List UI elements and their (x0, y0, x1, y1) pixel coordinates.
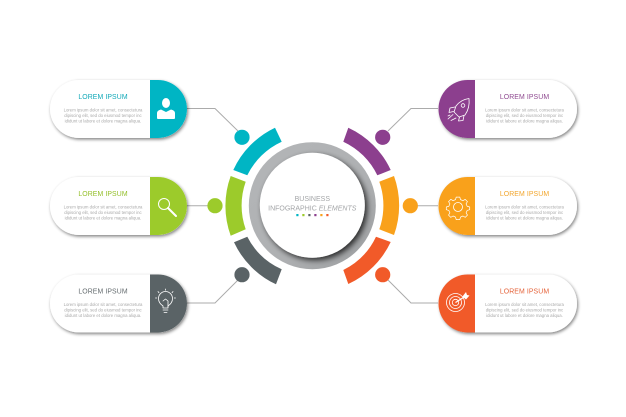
panel: gray card: Lorem ipsum dolor sit amet, consectetura (64, 302, 143, 307)
panel: green card: Lorem ipsum dolor sit amet, consectetura (64, 204, 143, 210)
panel: green card: LOREM IPSUM (78, 191, 128, 198)
panel: green card (50, 177, 187, 235)
central circle (249, 142, 376, 269)
panel: red card: LOREM IPSUM (500, 288, 549, 296)
panel: teal card (50, 80, 187, 138)
center title: INFOGRAPHIC ELEMENTS (268, 206, 357, 213)
panel: red card (438, 274, 577, 332)
panel: green card: ididunt ut labore et dolore magna aliqua. (65, 216, 141, 220)
arc segments (225, 128, 399, 284)
center title (268, 196, 357, 213)
node dots (207, 130, 418, 282)
panel: purple card (438, 80, 577, 138)
panel: teal card: Lorem ipsum dolor sit amet, consectetura (64, 108, 143, 112)
panel: teal card: ididunt ut labore et dolore magna aliqua. (65, 118, 141, 124)
panel: gray card (50, 274, 187, 332)
panel: red card: dipiscing elit, sed do eiusmod tempor inc (486, 308, 564, 312)
panel: purple card: Lorem ipsum dolor sit amet, consectetura (485, 108, 565, 112)
icon: rocket (448, 98, 469, 121)
panel: teal card: LOREM IPSUM (78, 94, 128, 101)
panel: orange card: Lorem ipsum dolor sit amet, consectetura (485, 204, 565, 210)
icon: person (157, 98, 175, 119)
icon: gear (446, 197, 470, 220)
icon: target (446, 292, 470, 312)
panel: orange card: LOREM IPSUM (500, 191, 549, 198)
center title: BUSINESS (295, 196, 330, 203)
panel: purple card: ididunt ut labore et dolore magna aliqua. (486, 118, 563, 124)
panel: red card: Lorem ipsum dolor sit amet, consectetura (485, 302, 565, 307)
panel: gray card: ididunt ut labore et dolore magna aliqua. (65, 313, 141, 318)
panel: orange card: dipiscing elit, sed do eiusmod tempor inc (486, 210, 564, 215)
panel: purple card: LOREM IPSUM (500, 94, 549, 101)
panel: purple card: dipiscing elit, sed do eiusmod tempor inc (486, 113, 564, 118)
icon: light bulb (156, 289, 176, 312)
connector lines (187, 108, 438, 303)
panel: green card: dipiscing elit, sed do eiusmod tempor inc (64, 210, 143, 215)
center color dots (296, 214, 328, 216)
panel: red card: ididunt ut labore et dolore magna aliqua. (486, 313, 563, 318)
panel: teal card: dipiscing elit, sed do eiusmod tempor inc (64, 113, 143, 118)
panel: orange card (438, 177, 577, 235)
panel: gray card: LOREM IPSUM (78, 288, 128, 296)
icon: magnifier (158, 198, 176, 216)
panel: gray card: dipiscing elit, sed do eiusmod tempor inc (64, 308, 143, 312)
panel: orange card: ididunt ut labore et dolore magna aliqua. (486, 216, 563, 220)
